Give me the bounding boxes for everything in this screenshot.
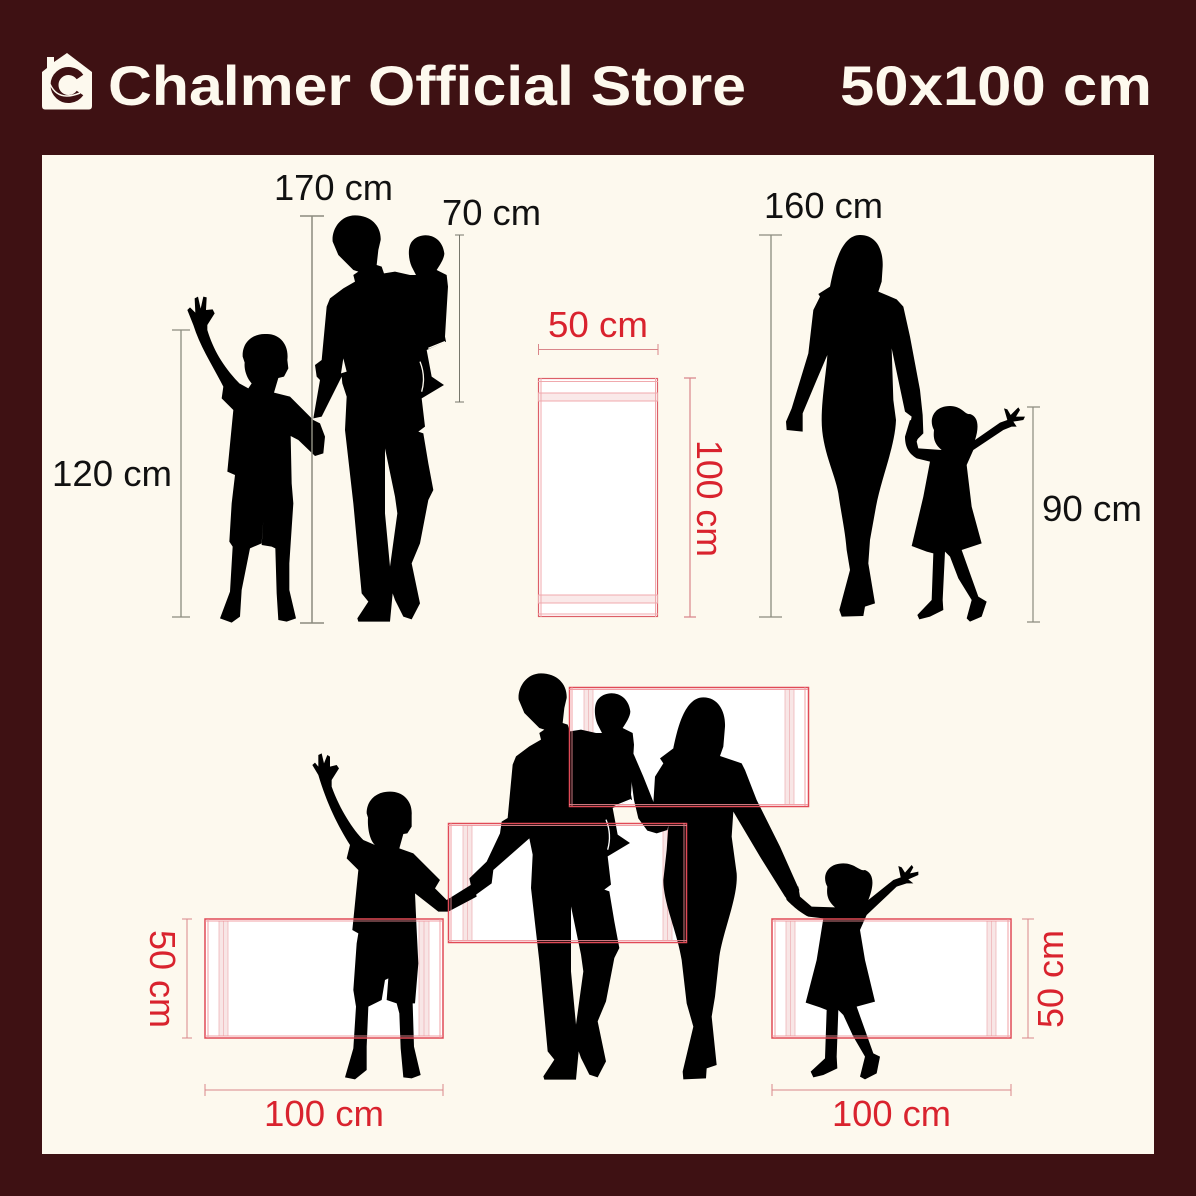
dimension: toddler height [455, 235, 464, 402]
silhouette: man carrying toddler, top [313, 215, 448, 622]
towel: vertical 50x100 [538, 378, 658, 617]
label: 90 cm: 90 cm [1042, 488, 1142, 529]
label: right 50 cm: 50 cm [1030, 930, 1071, 1028]
dimension: right towel width [772, 1084, 1011, 1096]
dimension: woman height [759, 235, 782, 617]
label: right 100 cm: 100 cm [832, 1093, 951, 1134]
label: 100 cm rotated: 100 cm [689, 440, 730, 557]
silhouette: boy waving, top [187, 297, 325, 623]
header [42, 53, 1152, 117]
dimension: boy height [172, 330, 190, 617]
silhouette: woman, bottom [630, 697, 799, 1079]
label: left 50 cm: 50 cm [142, 930, 183, 1028]
silhouette: man carrying toddler, bottom [469, 673, 634, 1080]
man's arm reaching to woman [630, 753, 670, 833]
label: 160 cm: 160 cm [764, 185, 883, 226]
silhouette: girl waving, top [905, 406, 1025, 622]
dimension: right towel height [1022, 919, 1034, 1038]
dimension: towel width [538, 344, 658, 355]
dimension: left towel width [205, 1084, 443, 1096]
icon: Chalmer house logo [42, 53, 92, 110]
title: towel size: 50x100 cm [840, 54, 1152, 117]
dimension: man height [300, 216, 324, 623]
panel: size comparison [42, 155, 1154, 1154]
silhouette: woman, top [786, 235, 923, 617]
label: left 100 cm: 100 cm [264, 1093, 384, 1134]
label: 170 cm: 170 cm [274, 167, 393, 208]
towel fills: family arrangement [205, 687, 1011, 1038]
dimension: towel length [684, 378, 696, 617]
label: 120 cm: 120 cm [52, 453, 172, 494]
title: store name: Chalmer Official Store [108, 54, 746, 117]
towel outlines over silhouettes [205, 687, 1011, 1038]
silhouette: boy, bottom [312, 753, 477, 1079]
dimension: left towel height [182, 919, 192, 1038]
silhouette: girl, bottom [784, 863, 918, 1079]
label: 50 cm: 50 cm [548, 304, 648, 345]
dimension: girl height [1027, 407, 1040, 622]
label: 70 cm: 70 cm [442, 192, 541, 233]
